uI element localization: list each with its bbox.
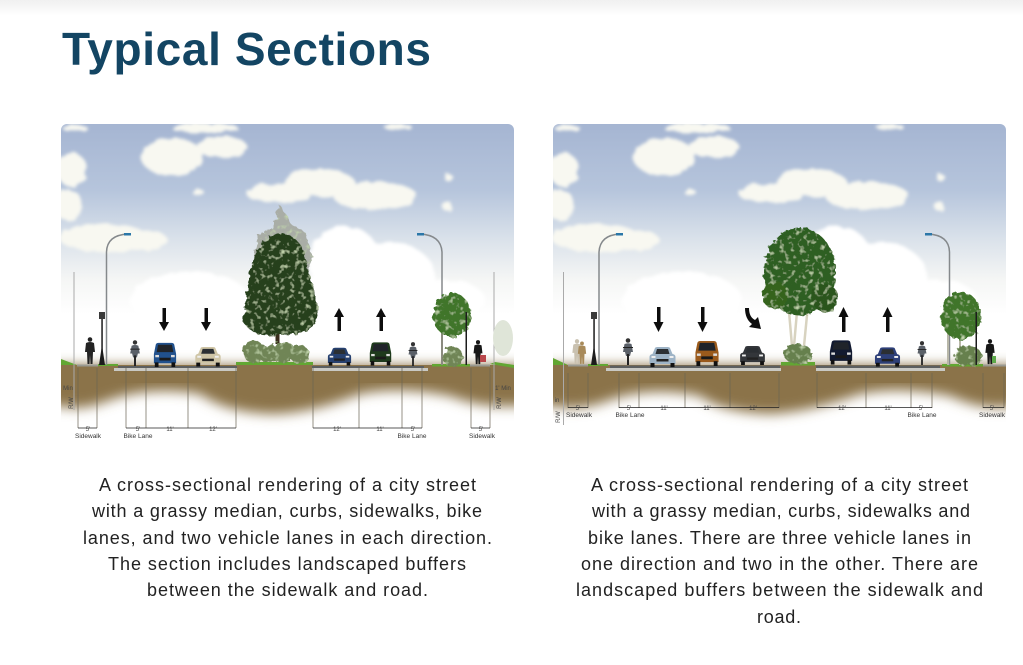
dimension labels: R/W bbox=[69, 397, 75, 409]
traffic arrows bbox=[159, 308, 386, 331]
dimension labels: R/W bbox=[497, 397, 503, 409]
dimension labels bbox=[555, 398, 1006, 423]
dimension labels: Bike Lane bbox=[616, 412, 645, 419]
caption: right section bbox=[576, 475, 983, 627]
R/W line bbox=[563, 272, 564, 425]
dimension labels bbox=[63, 386, 511, 440]
caption: right section: road. bbox=[757, 607, 801, 627]
sidewalks bbox=[568, 364, 1006, 366]
dimension lines bbox=[78, 368, 490, 428]
cars bbox=[154, 342, 391, 367]
dimension labels: Min bbox=[63, 386, 73, 392]
dimension labels: Bike Lane bbox=[398, 433, 427, 440]
caption: left section: with a grassy median, curbs, sidewalks, bike bbox=[91, 501, 482, 521]
lamp post bbox=[591, 312, 597, 365]
median shrubs bbox=[243, 341, 309, 363]
panel: street section with two lanes each direction bbox=[61, 124, 514, 438]
right side tree bbox=[433, 293, 471, 367]
sky bbox=[61, 124, 514, 286]
clouds bbox=[61, 124, 468, 286]
ground soil bbox=[522, 365, 1023, 414]
street light left bbox=[106, 234, 124, 365]
dimension labels: 11' bbox=[376, 427, 384, 433]
top shadow band bbox=[0, 0, 1023, 16]
ground soil bbox=[30, 365, 545, 414]
dimension labels: Bike Lane bbox=[124, 433, 153, 440]
dimension labels: 5' bbox=[990, 406, 994, 412]
caption: left section bbox=[83, 475, 492, 600]
dimension labels: Sidewalk bbox=[469, 433, 496, 440]
median tree bbox=[243, 205, 318, 344]
dimension labels: R/W bbox=[556, 411, 562, 423]
lamp post bbox=[99, 312, 105, 365]
caption: left section: A cross-sectional rendering of a city street bbox=[99, 475, 476, 495]
dimension labels: 5' bbox=[136, 427, 140, 433]
road left bbox=[606, 366, 781, 371]
dimension labels: 12' bbox=[838, 406, 846, 412]
caption: right section: bike lanes. There are three vehicle lanes in bbox=[588, 528, 971, 548]
sky bbox=[553, 124, 1006, 286]
people bbox=[85, 337, 486, 366]
road right bbox=[816, 366, 945, 371]
dimension labels: Sidewalk bbox=[566, 412, 593, 419]
sidewalks bbox=[77, 364, 490, 366]
right side tree bbox=[941, 292, 982, 366]
caption: left section: The section includes landscaped buffers bbox=[108, 554, 466, 574]
ground top layer bbox=[553, 365, 1006, 383]
dimension labels: Sidewalk bbox=[979, 412, 1006, 419]
dimension labels: Bike Lane bbox=[908, 412, 937, 419]
road left bbox=[114, 366, 237, 371]
faint distant tree bbox=[493, 320, 513, 356]
street light right bbox=[932, 234, 950, 365]
dimension labels: 1' Min bbox=[495, 386, 511, 392]
traffic arrows bbox=[654, 307, 892, 332]
caption: right section: landscaped buffers between the sidewalk and bbox=[576, 580, 983, 600]
dimension lines bbox=[568, 373, 1004, 408]
dimension labels: 11' bbox=[166, 427, 174, 433]
dimension labels: 12' bbox=[209, 427, 217, 433]
dimension labels: 5' bbox=[576, 406, 580, 412]
dimension labels: 12' bbox=[333, 427, 341, 433]
R/W lines bbox=[74, 272, 494, 410]
dimension labels: 5' bbox=[86, 427, 90, 433]
grass strips bbox=[553, 358, 983, 366]
caption: right section: one direction and two in the other. There are bbox=[581, 554, 978, 574]
cars bbox=[650, 340, 900, 367]
dimension labels: 11' bbox=[660, 406, 668, 412]
dimension labels: in bbox=[555, 398, 559, 404]
street light right bbox=[424, 234, 443, 298]
dimension labels: 11' bbox=[703, 406, 711, 412]
ground top layer bbox=[61, 365, 514, 383]
caption: left section: lanes, and two vehicle lanes in each direction. bbox=[83, 528, 492, 548]
title: Typical Sections bbox=[62, 23, 431, 75]
dimension labels: 5' bbox=[479, 427, 483, 433]
caption: left section: between the sidewalk and road. bbox=[147, 580, 428, 600]
dimension labels: Sidewalk bbox=[75, 433, 102, 440]
dimension labels: 11' bbox=[884, 406, 892, 412]
clouds bbox=[553, 124, 960, 286]
caption: right section: with a grassy median, curbs, sidewalks and bbox=[591, 501, 970, 521]
caption: right section: A cross-sectional rendering of a city street bbox=[591, 475, 968, 495]
dimension labels: 5' bbox=[411, 427, 415, 433]
grass strips bbox=[61, 359, 514, 368]
road right bbox=[312, 366, 428, 371]
people bbox=[572, 338, 996, 365]
median tree bbox=[762, 228, 838, 364]
dimension labels: 5' bbox=[627, 406, 631, 412]
dimension labels: 12' bbox=[749, 406, 757, 412]
street light left bbox=[598, 234, 616, 365]
panel: street section with three lanes one direction and two the other bbox=[553, 124, 1006, 425]
dimension labels: 5' bbox=[919, 406, 923, 412]
